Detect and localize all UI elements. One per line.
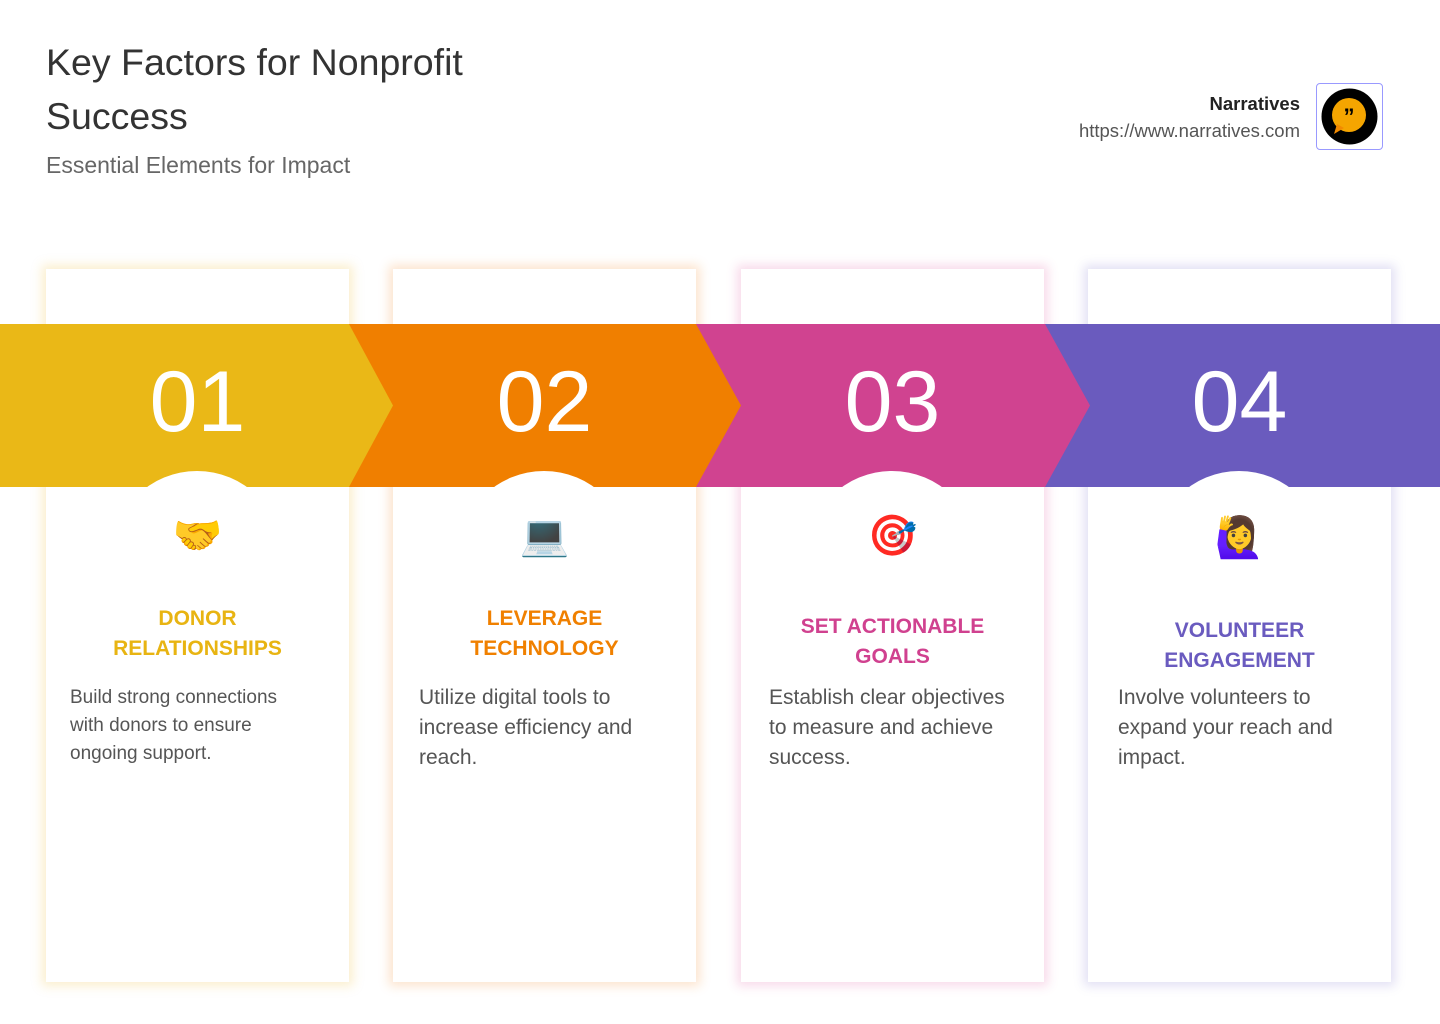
content 2: 💻 xyxy=(520,514,569,558)
card 2 xyxy=(393,269,696,982)
content 1: DONOR xyxy=(158,607,237,630)
card 4 xyxy=(1088,269,1391,982)
content 4 xyxy=(1118,515,1333,769)
content 3: 🎯 xyxy=(868,514,917,558)
numbers: 01 xyxy=(150,354,245,450)
content 2 xyxy=(419,514,632,769)
content 1 xyxy=(70,514,282,764)
content 3: SET ACTIONABLE xyxy=(801,615,984,638)
content 3 xyxy=(769,514,1005,769)
content 2: Utilize digital tools to increase efficiency and reach. xyxy=(419,686,632,769)
content 1: RELATIONSHIPS xyxy=(113,637,282,660)
title: Success xyxy=(46,95,188,137)
text: 02 xyxy=(497,354,592,450)
brand xyxy=(1079,93,1300,141)
content 2: TECHNOLOGY xyxy=(470,637,619,660)
content 4: 🙋‍♀️ xyxy=(1215,516,1264,560)
content 4: Involve volunteers to expand your reach and impact. xyxy=(1118,686,1333,769)
text: 03 xyxy=(845,354,940,450)
content 4: ENGAGEMENT xyxy=(1164,649,1315,672)
content 1: Build strong connections with donors to ensure ongoing support. xyxy=(70,687,277,764)
subtitle: Essential Elements for Impact xyxy=(46,152,350,178)
content 2: LEVERAGE xyxy=(487,607,602,630)
icon: logo: ” xyxy=(1344,104,1354,129)
title xyxy=(46,41,463,137)
content 3: Establish clear objectives to measure and achieve success. xyxy=(769,686,1005,769)
icon: logo xyxy=(1316,83,1383,150)
content 4: VOLUNTEER xyxy=(1175,619,1304,642)
brand: https://www.narratives.com xyxy=(1079,120,1300,141)
card 1 xyxy=(46,269,349,982)
content 3: GOALS xyxy=(855,645,930,668)
brand: Narratives xyxy=(1209,93,1300,114)
card 3 xyxy=(741,269,1044,982)
content 1: 🤝 xyxy=(173,514,222,558)
title: Key Factors for Nonprofit xyxy=(46,41,463,83)
text: 04 xyxy=(1192,354,1287,450)
